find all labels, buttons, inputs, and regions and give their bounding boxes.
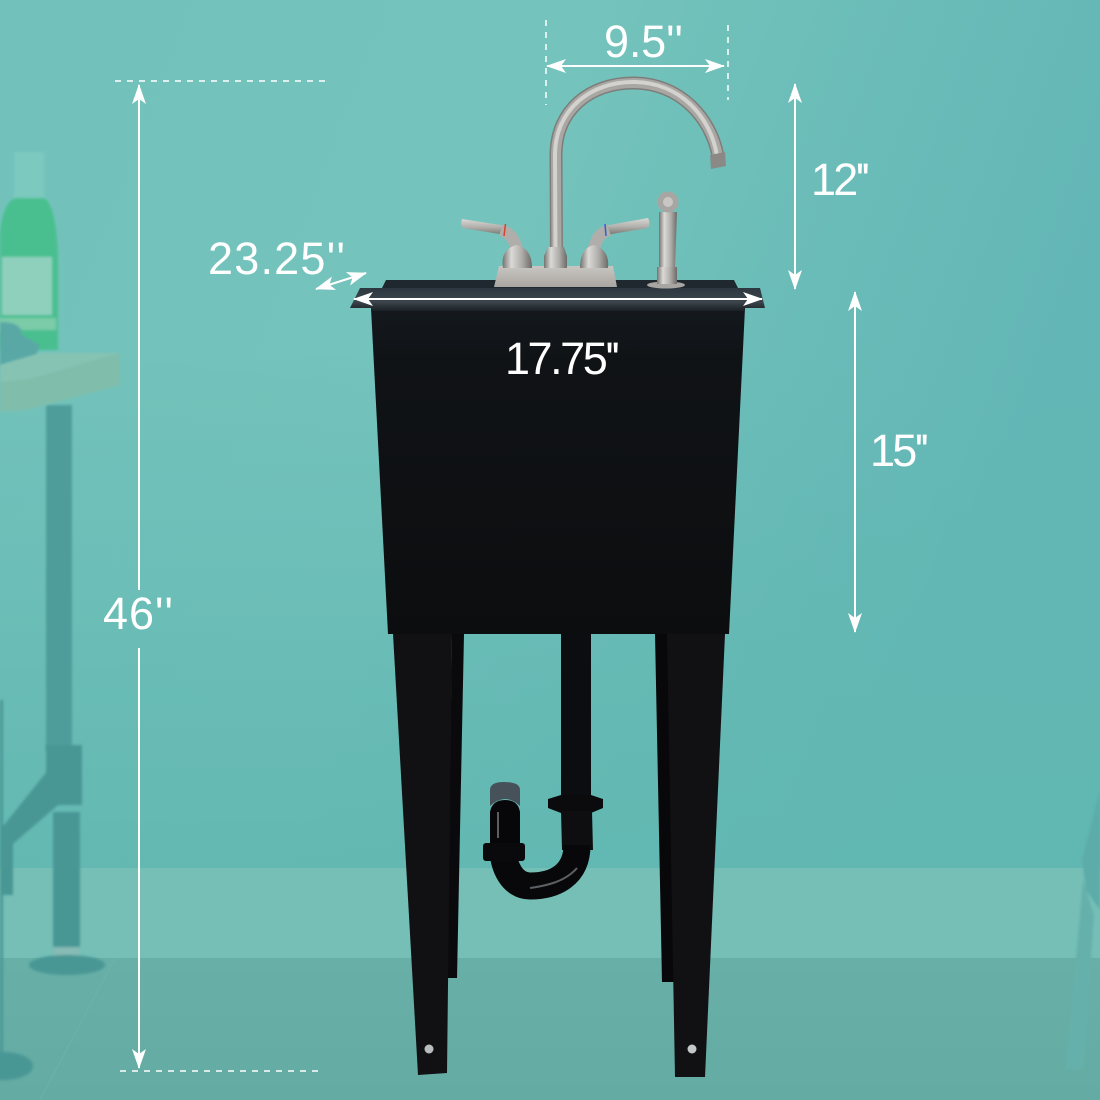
background: wall [0, 0, 1100, 880]
sink: front rim [350, 288, 765, 311]
dimension: 9.5 inch spout reach [546, 16, 728, 105]
background: chair leg [1066, 790, 1100, 1070]
right leg [655, 634, 725, 1077]
sink: back rim [382, 280, 738, 288]
background: pipe fittings and stand [0, 700, 105, 1080]
background: floor [0, 958, 1100, 1100]
sink: drain pipe and P-trap [483, 634, 603, 888]
left leg [393, 634, 464, 1075]
dimension: 17.75 inch depth: 17.75'' [505, 333, 620, 384]
background: baseboard [0, 868, 1100, 958]
faucet: side sprayer [647, 192, 685, 288]
dimension: 46 inch overall height: 46'' [103, 588, 173, 639]
dimension: 9.5 inch spout reach: 9.5'' [604, 16, 683, 67]
faucet: spout [555, 82, 726, 250]
sink: basin body [371, 308, 745, 634]
dimension: 23.25 inch width: 23.25'' [208, 233, 345, 284]
background: soap bottle [0, 152, 58, 350]
faucet: centre nut [544, 247, 567, 268]
background: towel [0, 322, 40, 366]
background: table shelf [0, 353, 120, 412]
dimension: 12 inch faucet height: 12'' [811, 154, 870, 205]
dimension: 46 inch overall height [103, 81, 327, 1071]
faucet: right handle [580, 218, 650, 268]
faucet: left handle [461, 219, 532, 268]
sink: legs [393, 634, 725, 1077]
faucet: deck plate [494, 266, 617, 287]
background: table leg upper [46, 405, 72, 750]
dimension: 15 inch basin depth: 15'' [870, 425, 929, 476]
